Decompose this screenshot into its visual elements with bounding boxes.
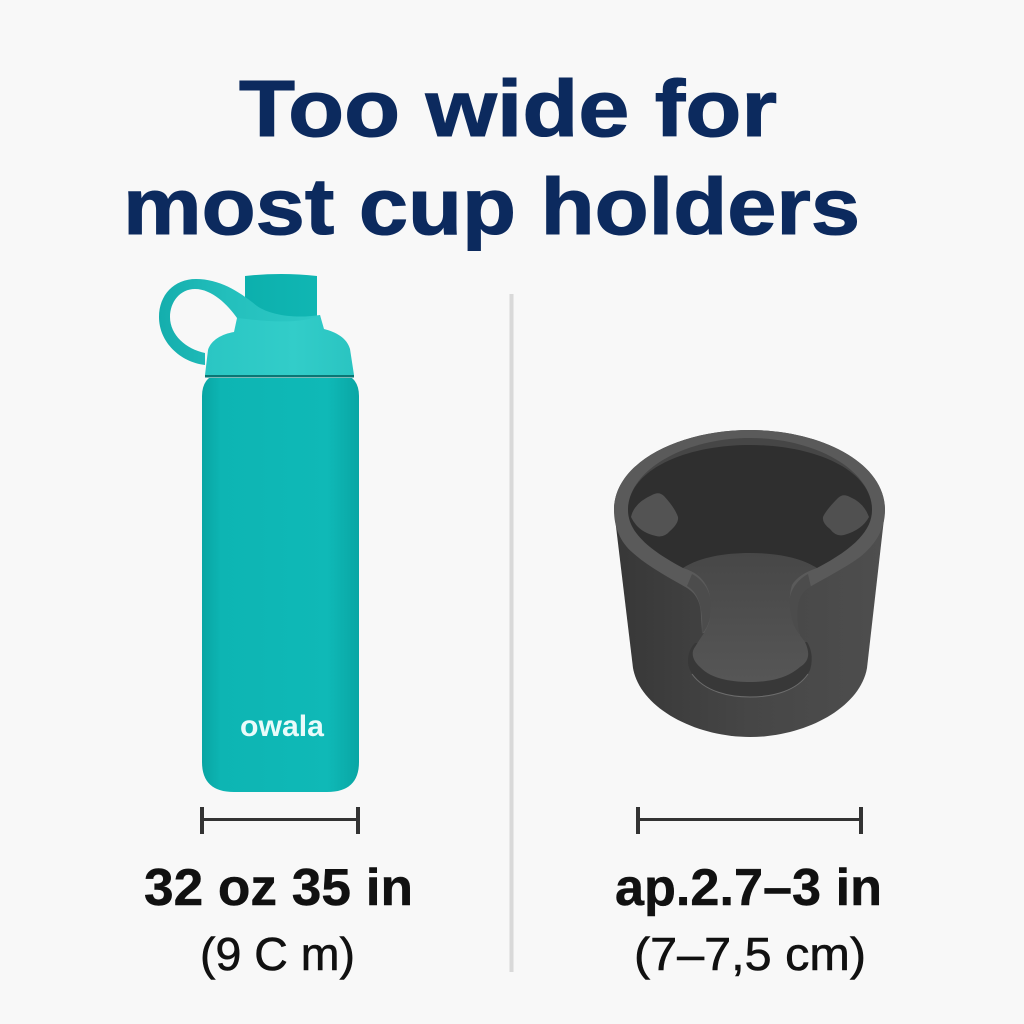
bottle size label bbox=[144, 859, 413, 980]
rim inner ledge bbox=[628, 438, 872, 510]
bottle size label: (9 C m) bbox=[200, 928, 355, 980]
right notch shading bbox=[789, 574, 811, 636]
holder inner cavity bbox=[628, 445, 872, 568]
left notch shading bbox=[687, 574, 711, 634]
vertical divider bbox=[510, 294, 514, 972]
holder body bbox=[614, 430, 885, 737]
title: Too wide for bbox=[239, 64, 777, 153]
bottle cap bbox=[205, 315, 354, 375]
bottle carry loop and strap bbox=[159, 279, 322, 365]
recess lip highlight bbox=[692, 674, 808, 697]
illustration: teal water bottle bbox=[159, 274, 359, 792]
bottle body bbox=[202, 378, 359, 792]
bottle spout bbox=[245, 274, 317, 325]
lower recess bbox=[688, 642, 812, 697]
holder rim bbox=[614, 430, 885, 635]
brand label: owala bbox=[240, 710, 324, 743]
title: most cup holders bbox=[123, 162, 860, 251]
title bbox=[123, 64, 860, 251]
illustration: black cup holder bbox=[614, 430, 885, 737]
bottle size label: 32 oz 35 in bbox=[144, 859, 413, 917]
right grip tab bbox=[823, 495, 869, 535]
left grip tab bbox=[631, 493, 678, 536]
holder floor bbox=[683, 553, 817, 682]
width bracket: bottle bbox=[200, 807, 360, 834]
cap shadow line bbox=[205, 375, 354, 378]
width bracket: cup holder bbox=[636, 807, 863, 834]
cup holder size label: ap.2.7–3 in bbox=[615, 859, 882, 917]
cup holder size label: (7–7,5 cm) bbox=[634, 928, 866, 980]
cup holder size label bbox=[615, 859, 882, 980]
